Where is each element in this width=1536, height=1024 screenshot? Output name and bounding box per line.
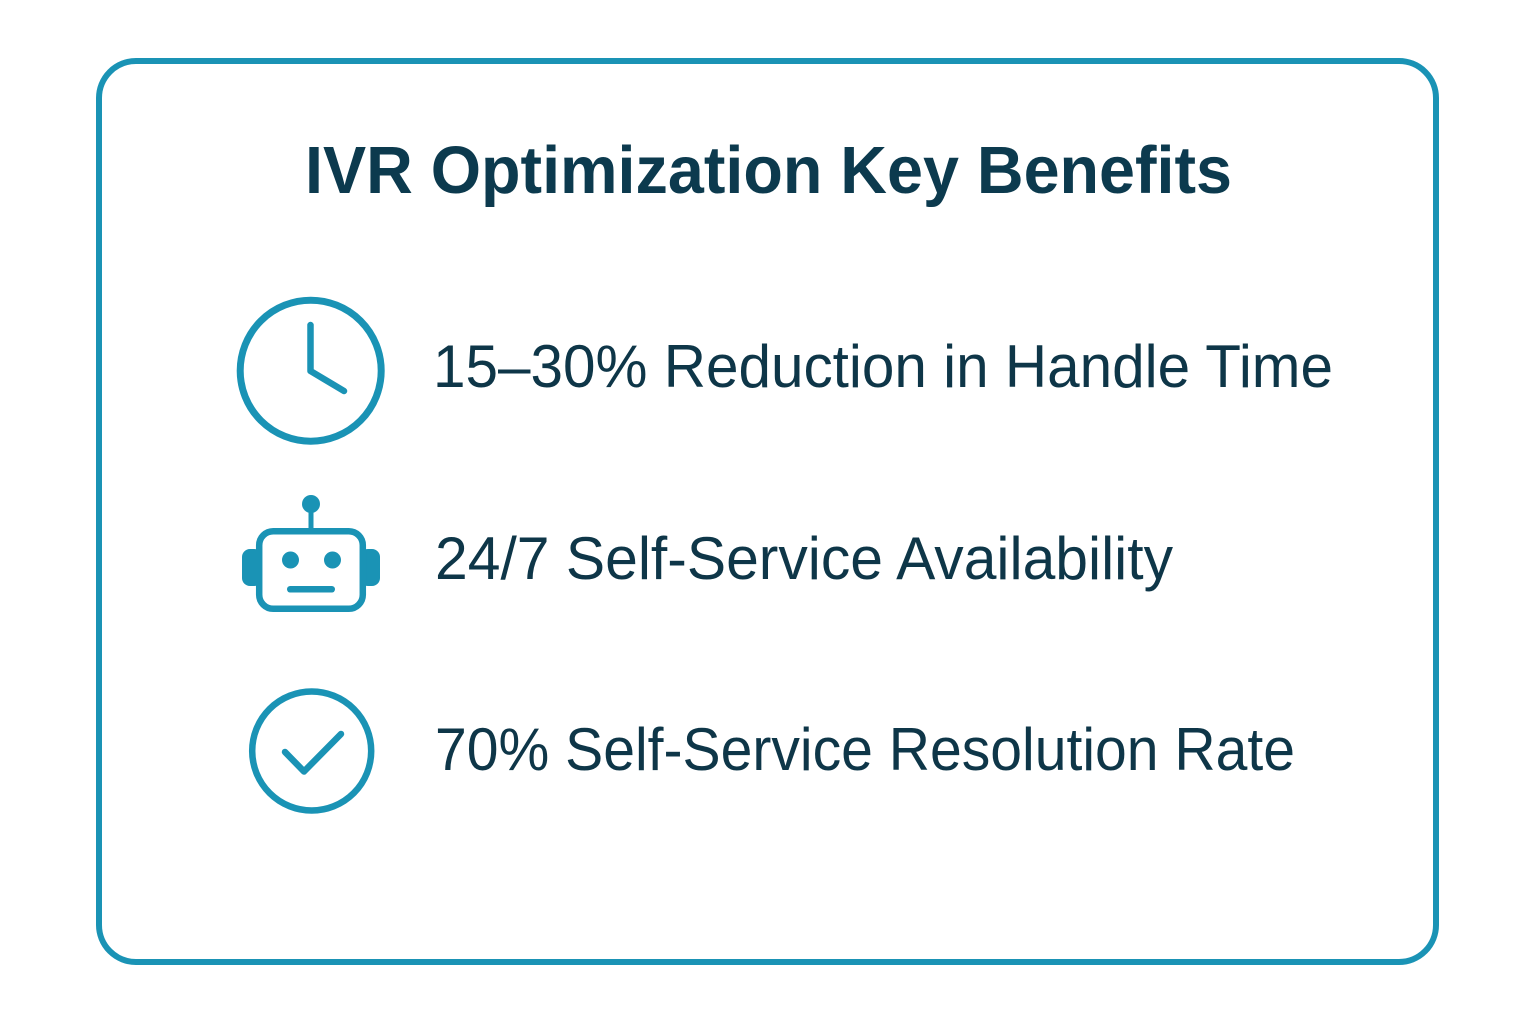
benefit text: handle time: 15–30% Reduction in Handle Time (433, 333, 1333, 400)
icon: clock (240, 300, 381, 441)
title: IVR Optimization Key Benefits (305, 133, 1232, 208)
panel: benefits card (99, 61, 1436, 962)
icon: robot (242, 495, 380, 609)
benefit text: resolution rate: 70% Self-Service Resolution Rate (435, 716, 1295, 783)
icon: check circle (252, 692, 371, 810)
benefit text: availability: 24/7 Self-Service Availability (435, 525, 1173, 592)
